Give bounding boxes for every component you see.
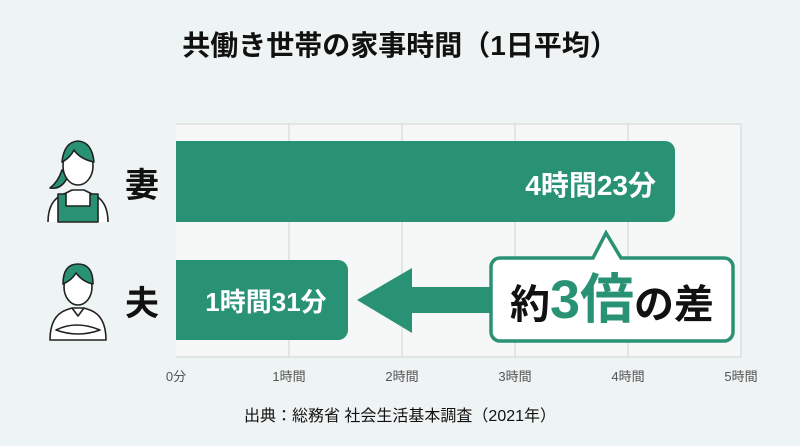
callout xyxy=(491,233,733,341)
arrow xyxy=(357,268,495,333)
axis labels: 4時間 xyxy=(611,369,645,384)
label: husband: 夫 xyxy=(125,285,159,323)
source: 出典：総務省 社会生活基本調査（2021年） xyxy=(244,408,556,425)
axis labels xyxy=(166,369,758,384)
bar: wife: 4時間23分 xyxy=(525,170,656,201)
axis labels: 3時間 xyxy=(498,369,532,384)
bar: husband xyxy=(176,260,348,340)
label: wife: 妻 xyxy=(125,167,159,205)
icon: man xyxy=(50,264,106,340)
title: 共働き世帯の家事時間（1日平均） xyxy=(182,30,618,61)
axis labels: 0分 xyxy=(166,369,186,384)
bar: wife xyxy=(176,141,675,222)
axis labels: 5時間 xyxy=(724,369,758,384)
axis labels: 1時間 xyxy=(272,369,306,384)
callout: 約3倍の差 xyxy=(510,270,714,330)
icon: woman xyxy=(48,141,108,222)
axis labels: 2時間 xyxy=(385,369,419,384)
bar: husband: 1時間31分 xyxy=(205,287,327,317)
